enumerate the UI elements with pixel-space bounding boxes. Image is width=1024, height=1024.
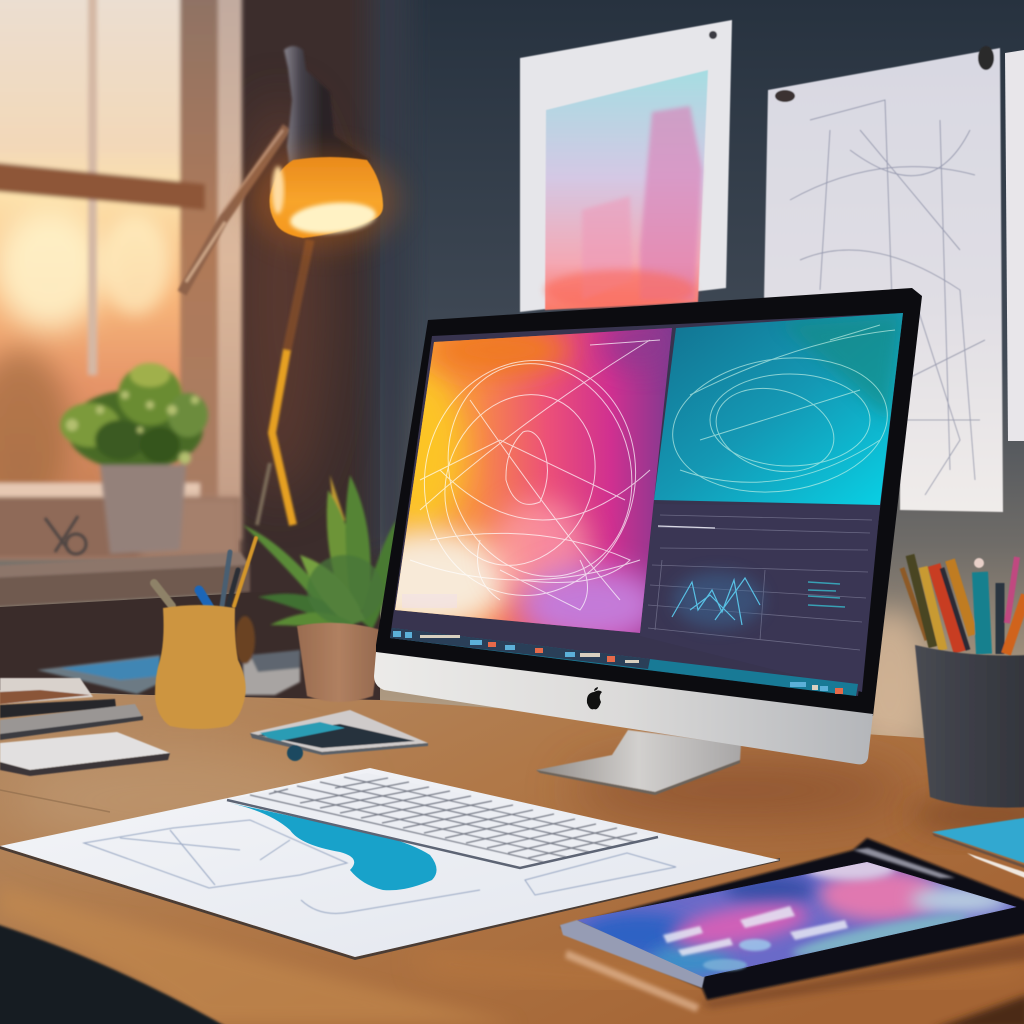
design sheet	[0, 768, 780, 960]
tablet reflection	[565, 950, 700, 1012]
poster: technical sketch	[764, 46, 1003, 512]
plant on window sill	[60, 363, 208, 554]
desk lighting and grain	[0, 745, 1024, 1024]
tablet silver side	[560, 920, 705, 988]
teal notebook right	[932, 817, 1024, 880]
stack of books behind cup	[37, 616, 300, 695]
monitor chin	[374, 652, 873, 764]
screen background	[390, 313, 903, 696]
tablet top edge highlight	[853, 848, 955, 878]
tablet shadow	[700, 940, 1024, 1008]
wireframe sketch on sheet	[84, 820, 676, 914]
under desk shadow	[0, 922, 232, 1024]
small notebook on desk	[250, 710, 428, 761]
lamp	[182, 46, 400, 525]
plant pot	[297, 623, 381, 702]
teal artwork panel	[654, 313, 903, 505]
lamp shade left shine	[272, 166, 284, 214]
analytics panel	[640, 504, 880, 692]
wall under sill	[0, 590, 300, 700]
gradient artwork panel	[395, 328, 672, 633]
tan wall glow behind pencils	[850, 610, 930, 750]
poster: right edge sheet	[1005, 50, 1024, 441]
scissors on window ledge	[45, 516, 86, 554]
monitor bezel	[376, 288, 922, 716]
monitor	[350, 288, 922, 764]
taskbar	[390, 628, 858, 696]
pens and yellow cup	[154, 538, 256, 729]
tablet screen	[577, 856, 1017, 977]
notebooks left	[0, 678, 170, 776]
wall background	[0, 0, 1024, 800]
pencil cup	[915, 645, 1024, 808]
pencils	[902, 555, 1024, 654]
tablet screen icons	[663, 906, 848, 971]
poster: pastel city	[520, 20, 732, 312]
apple logo	[587, 687, 602, 709]
wall strip beside window	[230, 0, 410, 700]
yellow cup	[155, 605, 246, 729]
window sill	[0, 552, 250, 607]
plant and pot	[243, 475, 396, 702]
lamp shade	[270, 157, 383, 238]
tablet	[560, 838, 1024, 1012]
tablet body	[560, 838, 1024, 1000]
desk surface	[0, 692, 1024, 1024]
blue paint shape	[230, 803, 437, 890]
lamp glow	[250, 152, 400, 248]
monitor stand	[536, 730, 741, 795]
window	[0, 0, 242, 560]
lamp bulb highlight	[289, 199, 377, 237]
lamp arm	[182, 127, 310, 525]
lamp neck	[284, 46, 370, 170]
keyboard	[227, 773, 658, 868]
